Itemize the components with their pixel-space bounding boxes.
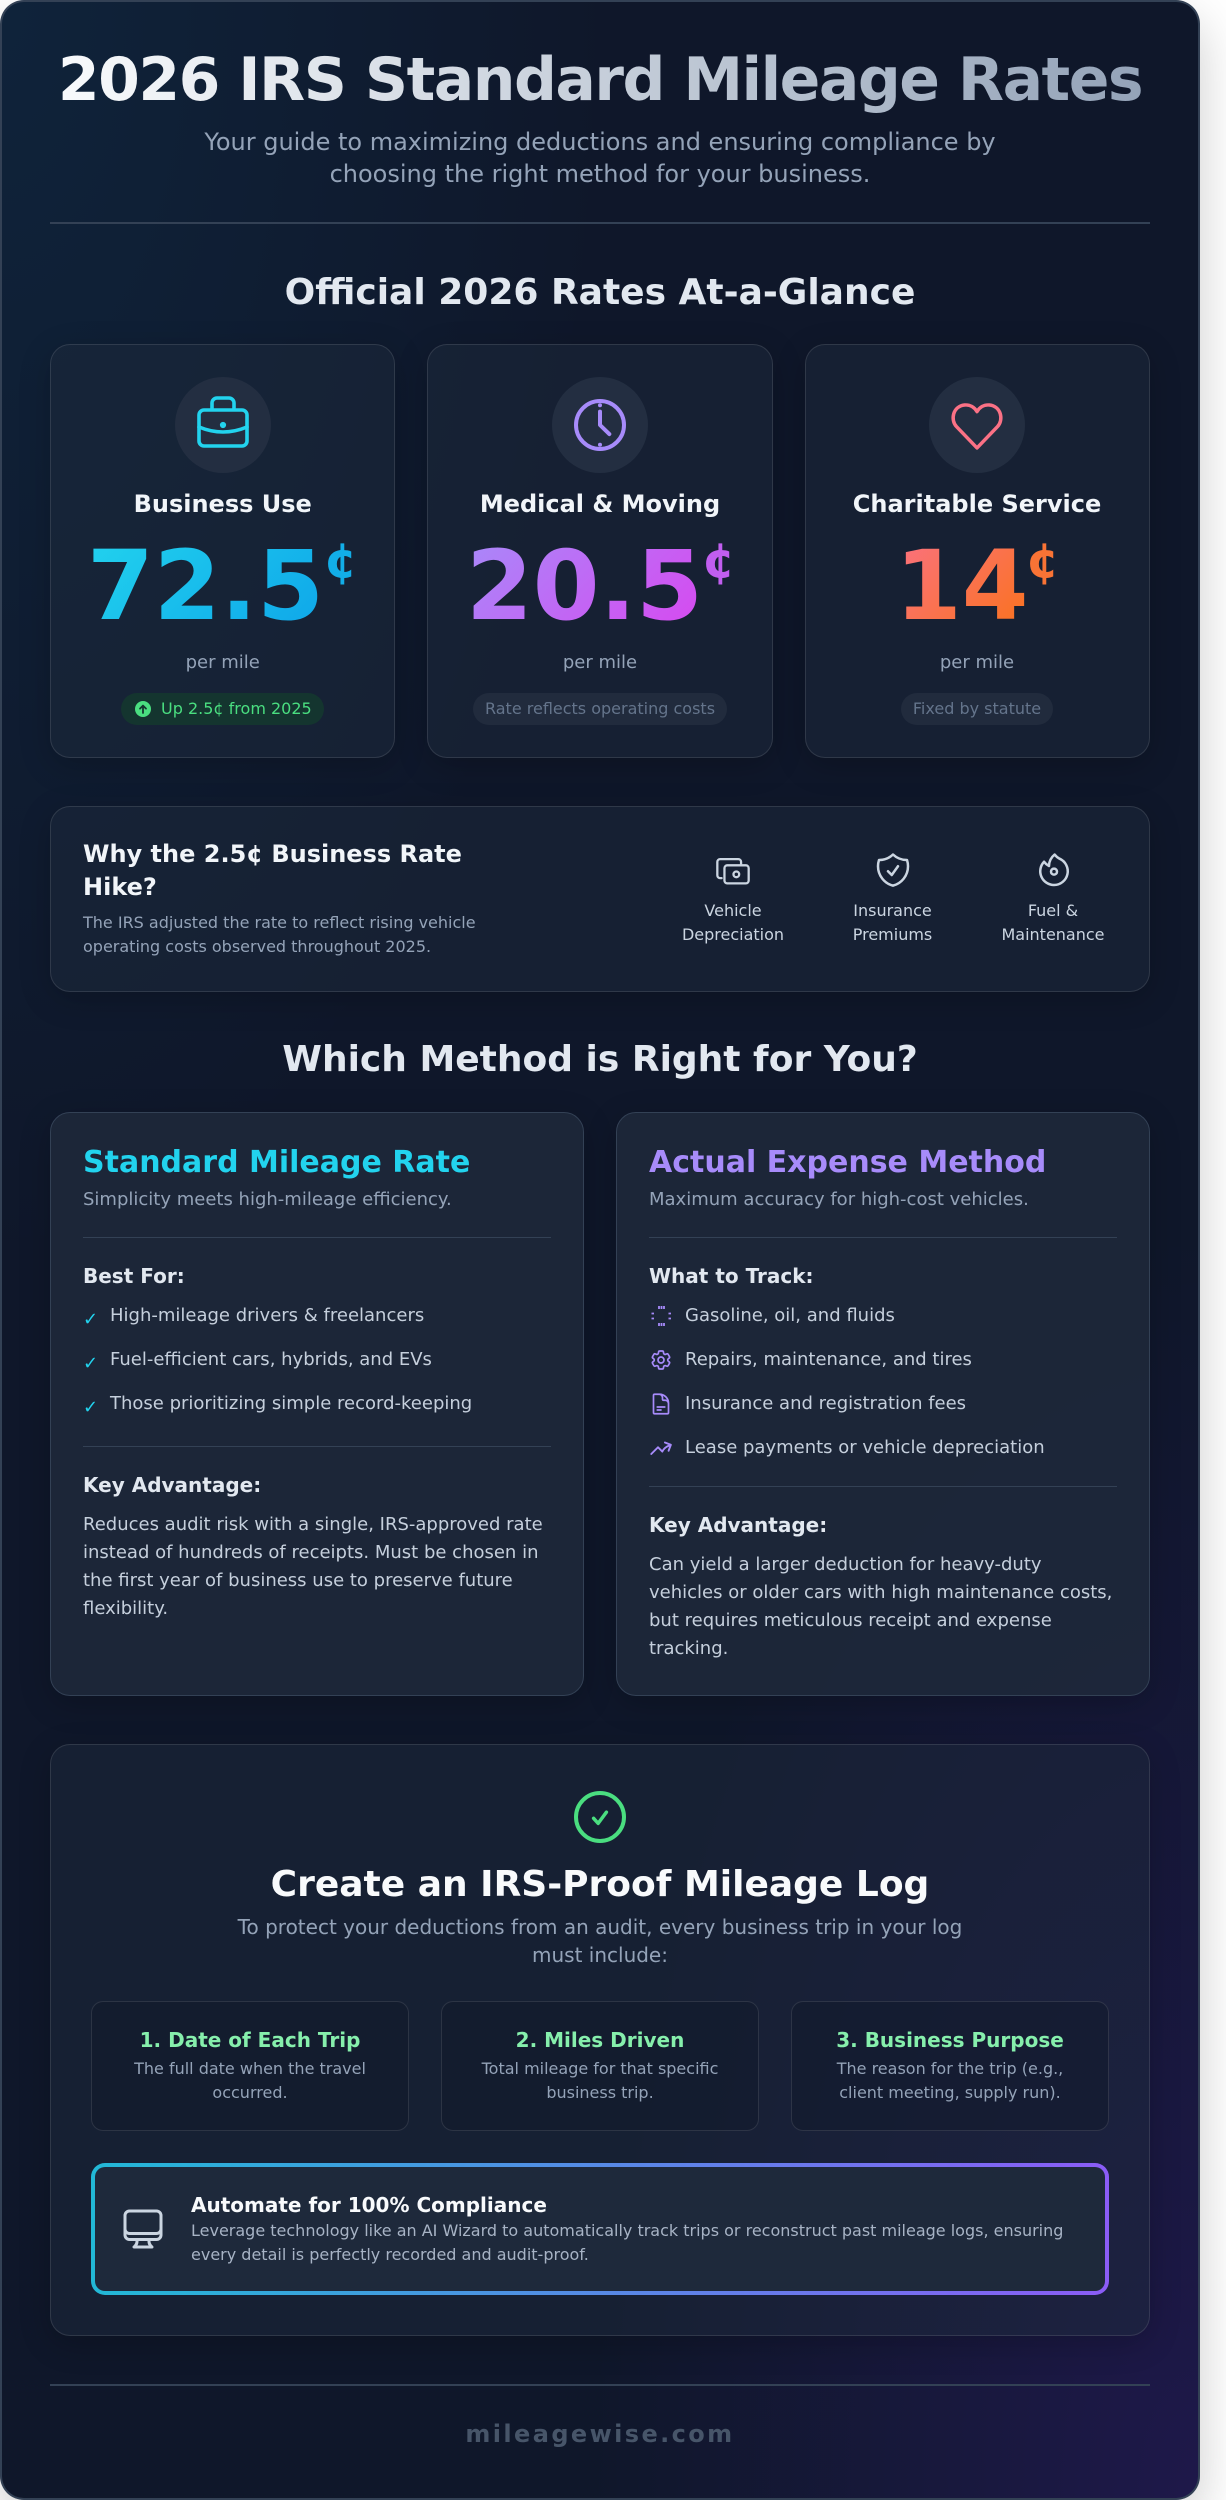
panel: why the rate rose	[50, 806, 1150, 992]
description: purpose	[836, 2059, 1063, 2102]
panel: mileage log	[50, 1744, 1150, 2336]
intro text: must include:	[532, 1943, 668, 1967]
badge: fixed by statute: Fixed by statute	[913, 699, 1041, 718]
icon: clock	[552, 377, 648, 473]
description: miles	[482, 2059, 718, 2102]
text: gasoline: Gasoline, oil, and fluids	[685, 1305, 895, 1326]
description	[82, 913, 476, 956]
badge: operating costs	[473, 693, 727, 725]
title: purpose: 3. Business Purpose	[836, 2028, 1064, 2052]
icon: gasoline	[652, 1306, 671, 1326]
unit: per mile: per mile	[940, 652, 1014, 673]
paragraph: Reduces audit risk with a single, IRS-approved rate	[83, 1514, 543, 1535]
subheading: key advantage: Key Advantage:	[649, 1513, 827, 1537]
description: date: occurred.	[212, 2083, 288, 2102]
paragraph: instead of hundreds of receipts. Must be chosen in	[83, 1542, 538, 1563]
paragraph: but requires meticulous receipt and expense	[649, 1610, 1052, 1631]
rate: 72.5 cents	[87, 530, 357, 642]
description: operating costs observed throughout 2025.	[83, 937, 431, 956]
infographic card: ¢	[1026, 533, 1059, 589]
list: best for: ✓	[83, 1309, 98, 1330]
label: fuel and maintenance: Fuel &	[1028, 901, 1078, 920]
paragraph	[649, 1554, 1112, 1659]
unit: per mile: per mile	[563, 652, 637, 673]
panel: charitable service	[805, 344, 1150, 758]
label: vehicle depreciation	[682, 901, 784, 944]
label: insurance premiums: Insurance	[853, 901, 932, 920]
infographic card: 14	[895, 530, 1029, 642]
heading: rates at a glance: Official 2026 Rates At-a-Glance	[285, 272, 915, 313]
unit: per mile: per mile	[186, 652, 260, 673]
heading: standard mileage rate: Standard Mileage Rate	[83, 1145, 470, 1180]
icon: document	[652, 1393, 670, 1415]
paragraph	[83, 1514, 543, 1619]
footer brand: mileagewise.com	[465, 2420, 735, 2448]
card: purpose	[791, 2001, 1109, 2131]
rate: 14 cents	[895, 530, 1059, 642]
label: vehicle depreciation: Depreciation	[682, 925, 784, 944]
badge: operating costs: Rate reflects operating costs	[485, 699, 715, 718]
list: best for	[83, 1305, 472, 1418]
icon: heart	[929, 377, 1025, 473]
heading	[83, 840, 462, 901]
item: Fuel-efficient cars, hybrids, and EVs	[110, 1349, 432, 1370]
label: charitable service: Charitable Service	[853, 490, 1101, 518]
item: High-mileage drivers & freelancers	[110, 1305, 424, 1326]
text: repairs: Repairs, maintenance, and tires	[685, 1349, 972, 1370]
badge: up 2.5 cents	[121, 693, 324, 725]
text: insurance: Insurance and registration fees	[685, 1393, 966, 1414]
label: vehicle depreciation: Vehicle	[704, 901, 762, 920]
icon: fuel flame	[1039, 853, 1069, 886]
icon: monitor	[124, 2210, 162, 2248]
title: 2026 IRS Standard Mileage Rates	[58, 45, 1142, 115]
description: date	[134, 2059, 366, 2102]
callout text: every detail is perfectly recorded and audit-proof.	[191, 2245, 589, 2264]
icon: gear	[652, 1350, 670, 1370]
card: date	[91, 2001, 409, 2131]
label: fuel and maintenance: Maintenance	[1001, 925, 1105, 944]
icon: briefcase	[175, 377, 271, 473]
intro text	[238, 1915, 962, 1967]
callout text: Leverage technology like an AI Wizard to automatically track trips or reconstruct past mileage logs, ensuring	[191, 2221, 1063, 2240]
callout text	[191, 2221, 1063, 2264]
infographic card: 20.5	[466, 530, 703, 642]
panel: standard mileage rate	[50, 1112, 584, 1696]
description: miles: Total mileage for that specific	[482, 2059, 718, 2078]
tagline: Simplicity meets high-mileage efficiency.	[83, 1189, 452, 1210]
paragraph: Can yield a larger deduction for heavy-duty	[649, 1554, 1042, 1575]
intro text: To protect your deductions from an audit, every business trip in your log	[238, 1915, 962, 1939]
panel: medical and moving	[427, 344, 773, 758]
list: best for: ✓	[83, 1397, 98, 1418]
icon: trending up	[650, 1442, 672, 1455]
icon: vehicle depreciation	[716, 858, 750, 884]
label: insurance premiums: Premiums	[853, 925, 932, 944]
panel: actual expense method	[616, 1112, 1150, 1696]
label: medical and moving: Medical & Moving	[480, 490, 720, 518]
description: purpose: The reason for the trip (e.g.,	[837, 2059, 1063, 2078]
card: miles	[441, 2001, 759, 2131]
panel: business use	[50, 344, 395, 758]
infographic card: 72.5	[87, 530, 324, 642]
paragraph: the first year of business use to preserve future	[83, 1570, 513, 1591]
paragraph: vehicles or older cars with high maintenance costs,	[649, 1582, 1112, 1603]
badge: up 2.5 cents: Up 2.5¢ from 2025	[161, 699, 312, 718]
rate: 20.5 cents	[466, 530, 735, 642]
description: The IRS adjusted the rate to reflect rising vehicle	[83, 913, 476, 932]
icon: check circle	[574, 1791, 626, 1843]
list: best for: ✓	[83, 1353, 98, 1374]
paragraph: tracking.	[649, 1638, 728, 1659]
infographic card: ¢	[324, 533, 357, 589]
tagline: Maximum accuracy for high-cost vehicles.	[649, 1189, 1029, 1210]
label: insurance premiums	[853, 901, 932, 944]
subheading: key advantage: Key Advantage:	[83, 1473, 261, 1497]
subheading: what to track: What to Track:	[649, 1264, 814, 1288]
heading: Hike?	[83, 873, 157, 901]
description: purpose: client meeting, supply run).	[839, 2083, 1061, 2102]
label: fuel and maintenance	[1001, 901, 1105, 944]
subheading: best for: Best For:	[83, 1264, 185, 1288]
title: date: 1. Date of Each Trip	[140, 2028, 360, 2052]
subtitle	[204, 128, 996, 188]
heading: which method: Which Method is Right for You?	[282, 1039, 918, 1080]
label: business use: Business Use	[134, 490, 312, 518]
heading: Why the 2.5¢ Business Rate	[83, 840, 462, 868]
item: Those prioritizing simple record-keeping	[110, 1393, 472, 1414]
description: date: The full date when the travel	[134, 2059, 366, 2078]
description: miles: business trip.	[546, 2083, 654, 2102]
text: lease: Lease payments or vehicle depreciation	[685, 1437, 1045, 1458]
heading: mileage log: Create an IRS-Proof Mileage Log	[271, 1864, 929, 1905]
paragraph: flexibility.	[83, 1598, 168, 1619]
badge: fixed by statute	[901, 693, 1053, 725]
callout heading: Automate for 100% Compliance	[191, 2193, 547, 2217]
subtitle: Your guide to maximizing deductions and ensuring compliance by	[204, 128, 996, 156]
subtitle: choosing the right method for your business.	[330, 160, 870, 188]
infographic card: ¢	[702, 533, 735, 589]
title: miles: 2. Miles Driven	[516, 2028, 684, 2052]
callout: automate	[91, 2163, 1109, 2295]
text: why the hike	[82, 840, 476, 956]
icon: insurance shield	[876, 853, 910, 887]
heading: actual expense method: Actual Expense Method	[649, 1145, 1046, 1180]
